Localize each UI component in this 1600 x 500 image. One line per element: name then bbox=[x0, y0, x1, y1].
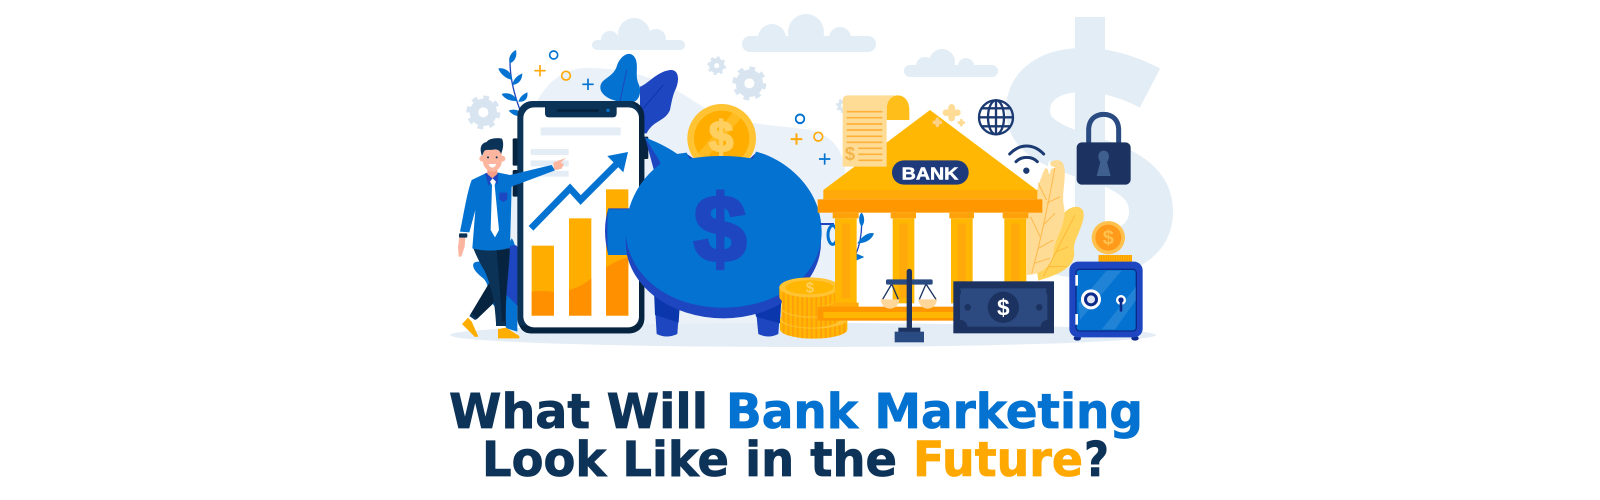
padlock bbox=[1077, 114, 1131, 185]
floor bbox=[818, 307, 978, 321]
jacket and arm bbox=[460, 165, 555, 250]
body bbox=[626, 152, 822, 308]
face bbox=[483, 147, 502, 172]
left illustration group: phone, person, piggy bank bbox=[458, 50, 822, 338]
column 1 bbox=[833, 213, 859, 307]
shoes bbox=[462, 318, 478, 337]
column 4 bbox=[1003, 213, 1028, 303]
column 2 bbox=[891, 213, 916, 303]
piggy bank bbox=[605, 104, 822, 336]
bar chart bbox=[532, 189, 628, 316]
left hand bbox=[458, 237, 465, 257]
column 3 bbox=[949, 213, 974, 303]
pig tail bbox=[820, 224, 837, 244]
wifi icon bbox=[1010, 146, 1044, 172]
body shadow bbox=[626, 166, 821, 318]
roof bbox=[823, 110, 1037, 190]
slot corners bbox=[685, 152, 757, 161]
branch behind phone bbox=[498, 50, 528, 116]
bank building bbox=[818, 110, 1042, 321]
small gear behind receipt bbox=[837, 99, 850, 112]
front leg bbox=[473, 248, 510, 323]
pale leaf bbox=[1027, 160, 1065, 275]
person bbox=[458, 138, 566, 338]
entablature bbox=[818, 199, 1042, 213]
title bbox=[449, 384, 1143, 488]
ears bbox=[479, 156, 485, 162]
sparkle decorations left of bank bbox=[791, 115, 830, 165]
branch between columns bbox=[853, 213, 874, 261]
screen text lines bbox=[531, 127, 621, 177]
dollar symbol: $ bbox=[694, 177, 746, 283]
cloud centre bbox=[742, 14, 876, 52]
title question mark: ? bbox=[1084, 432, 1109, 488]
receipt bbox=[843, 95, 909, 167]
sparkles on roof bbox=[934, 107, 964, 125]
blue leaf top right bbox=[640, 70, 678, 133]
eyes bbox=[487, 156, 489, 158]
receipt: $ bbox=[845, 143, 856, 164]
safe bbox=[1069, 262, 1143, 341]
decorative circles and sparkles bbox=[534, 51, 804, 145]
yellow leaf right bbox=[1037, 207, 1084, 281]
globe bbox=[979, 100, 1013, 134]
ear bbox=[645, 137, 680, 173]
snout bbox=[605, 208, 630, 255]
collar bbox=[485, 172, 498, 186]
blue leaf top left bbox=[600, 54, 640, 102]
cloud left bbox=[592, 18, 685, 50]
coin 1: $ bbox=[806, 281, 814, 297]
banknote bbox=[953, 281, 1054, 333]
ground shadow bbox=[450, 323, 1156, 347]
smartphone bbox=[513, 101, 648, 333]
cloud right bbox=[904, 49, 998, 77]
growth arrow bbox=[531, 152, 628, 228]
title line 1 dark: What Will bbox=[449, 384, 708, 440]
coin above safe bbox=[1092, 221, 1132, 263]
title line 2 dark: Look Like in the bbox=[482, 432, 897, 488]
legs bbox=[654, 290, 681, 336]
neck bbox=[487, 167, 497, 178]
hair bbox=[481, 138, 503, 156]
gear large left bbox=[469, 98, 498, 127]
coin 4 bbox=[780, 316, 848, 339]
title line 1 blue: Bank Marketing bbox=[726, 384, 1143, 440]
gear medium top bbox=[735, 69, 764, 98]
pocket bbox=[499, 193, 507, 202]
background: hill bbox=[505, 68, 845, 325]
coin 2 bbox=[782, 300, 835, 317]
white interior bbox=[857, 213, 1027, 308]
gear small top bbox=[709, 58, 725, 74]
BANK sign bbox=[892, 160, 969, 185]
banknote: $ bbox=[997, 294, 1010, 320]
coin 3 bbox=[781, 306, 840, 328]
blue leaf bottom left bbox=[473, 238, 518, 332]
coin entering slot bbox=[687, 104, 756, 173]
title line 2 orange: Future bbox=[913, 432, 1083, 488]
right illustration group: bank, lock, safe bbox=[773, 95, 1143, 342]
coin above safe: $ bbox=[1103, 228, 1114, 250]
BANK sign: BANK bbox=[902, 163, 959, 183]
scales of justice bbox=[881, 269, 937, 342]
roof band bbox=[823, 190, 1037, 199]
smile bbox=[489, 164, 496, 167]
pointing hand bbox=[553, 158, 566, 170]
coin stack bbox=[779, 277, 848, 339]
leaf sparkle bbox=[1043, 160, 1056, 175]
background: large pale dollar sign bbox=[1015, 17, 1151, 272]
tie bbox=[490, 178, 499, 237]
coin entering slot: $ bbox=[709, 114, 733, 162]
back leg bbox=[470, 282, 498, 319]
